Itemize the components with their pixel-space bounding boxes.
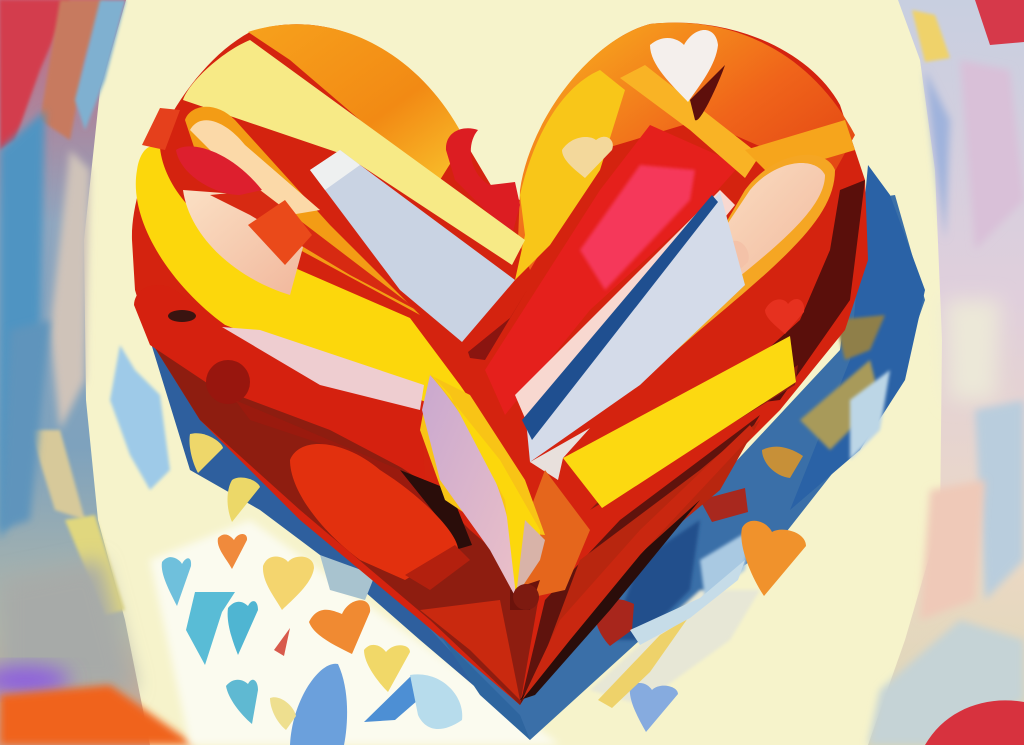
icon: blue shard [364,675,418,722]
shape: lilac blade with yellow backing [420,373,545,610]
shape: black shadow by paddle [400,470,472,550]
icon: orange heart [309,600,370,654]
icon: pale pink heart [698,237,749,288]
icon: red streak [274,628,290,656]
shape: red oval paddle [290,444,470,590]
shape: yellow-orange bar on right lobe [620,65,760,178]
shadow: blue wash under the heart [110,165,925,740]
icon: grey wash [320,555,375,600]
icon: yellow heart [189,433,223,473]
shape: yellow curved ribbon left [136,146,538,535]
icon: branch [630,560,745,645]
shape: red curl notch [446,128,520,235]
icon: small red heart right [765,299,804,334]
shape: tip dark red [420,600,520,700]
icon: pale yellow heart [270,697,296,730]
shape: pale yellow diagonal ribbon [183,40,525,265]
shape: yellow right-lobe fill [515,70,625,280]
icon: blue splash [186,592,235,665]
shape: orange bar second arm [745,120,855,175]
icon: blue swirl [410,674,462,729]
shape: orange centre wedge [510,470,590,610]
icon: blue heart [226,680,258,724]
shape: tip right streak [522,425,755,700]
panel: left painted band [0,0,195,745]
icon: orange heart [741,521,806,596]
heart: main red body [132,23,868,705]
icon: yellow heart [228,478,260,522]
shape: lower dark shading [150,340,540,705]
shape: red central panel [468,125,740,415]
shape: pale lilac strip [222,327,424,410]
shape: right pale finger panel [625,155,835,395]
shape: white-blue block [310,150,515,342]
heart: left orange lobe [248,24,465,180]
background: white glow under heart [150,520,560,745]
panel: right painted band [868,0,1024,745]
shape: bright yellow bar right [530,336,798,510]
shape: red square patch [248,200,312,265]
icon: red heart [700,488,748,522]
icon: yellow splash [598,618,688,708]
icon: white heart top right [650,30,725,120]
icon: blue heart [630,683,678,732]
heart: right orange lobe [518,23,855,270]
shape: red stub [142,108,180,150]
shape: white-blue long panel [515,190,745,462]
icons: small hearts scattered lower-left [162,433,462,745]
icon: blue leaf [290,664,347,745]
icon: tan heart [762,447,803,478]
icon: orange heart [218,534,247,569]
shape: pale cut-out panel left [142,107,420,315]
shape: blue tip shadow [440,635,530,740]
icon: small hearts lower-right [595,447,806,732]
icon: dark red heart [595,599,634,646]
icon: yellow heart [364,645,410,692]
shape: red tongue [176,146,262,195]
icon: yellow heart [263,556,314,610]
icon: blue heart [162,557,191,606]
shape: red tube left [134,285,440,520]
icon: pale heart in yellow [562,137,613,178]
icon: blue heart [228,601,258,655]
